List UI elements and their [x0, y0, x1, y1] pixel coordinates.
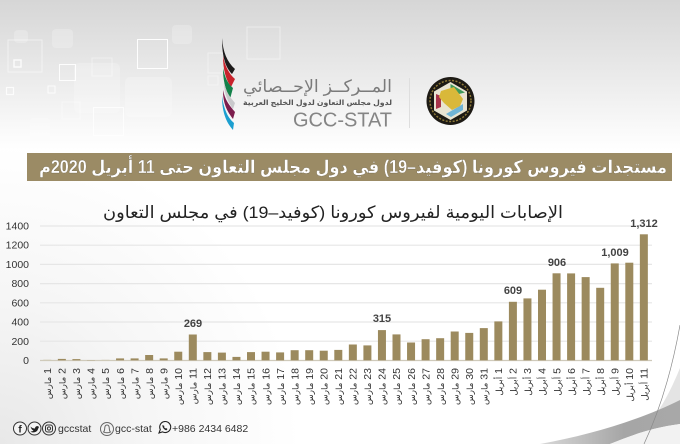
y axis labels: 800 — [11, 278, 29, 290]
x axis date labels: 1 أبريل — [493, 368, 505, 396]
x axis date labels: 11 أبريل — [639, 368, 651, 401]
x axis date labels: 22 مارس — [348, 368, 360, 405]
x axis date labels: 7 مارس — [129, 368, 141, 399]
x axis date labels: 18 مارس — [289, 368, 301, 405]
chart gridlines — [40, 226, 652, 360]
chart title: الإصابات اليومية لفيروس كورونا (كوفيد–19) في مجلس التعاون — [103, 203, 563, 223]
x axis date labels: 26 مارس — [406, 368, 418, 405]
x axis date labels: 6 أبريل — [566, 368, 578, 396]
decorative corner swoosh — [540, 325, 680, 444]
icon: twitter — [28, 422, 41, 435]
x axis date labels: 1 مارس — [42, 368, 54, 399]
x axis date labels: 15 مارس — [246, 368, 258, 405]
x axis date labels: 10 مارس — [173, 368, 185, 405]
icon: GCC emblem — [426, 77, 474, 125]
footer social contacts — [14, 422, 248, 436]
x axis date labels: 4 مارس — [86, 368, 98, 399]
logo divider — [409, 78, 410, 128]
x axis date labels: 21 مارس — [333, 368, 345, 405]
bar value labels: 315 — [373, 313, 391, 325]
x axis date labels: 9 مارس — [158, 368, 170, 399]
x axis date labels: 12 مارس — [202, 368, 214, 405]
y axis labels: 1200 — [6, 240, 29, 252]
icon: snapchat — [100, 422, 114, 436]
x axis date labels: 7 أبريل — [580, 368, 592, 396]
handle: gccstat: gccstat — [58, 423, 91, 435]
x axis date labels: 3 أبريل — [522, 368, 534, 396]
y axis labels: 600 — [11, 297, 29, 309]
icon: facebook — [14, 422, 26, 436]
x axis date labels: 8 مارس — [144, 368, 156, 399]
banner — [27, 153, 672, 181]
logo: Arabic name: المــركــز الإحــصائي — [243, 77, 392, 97]
x axis date labels: 29 مارس — [449, 368, 461, 405]
x axis date labels: 2 مارس — [57, 368, 69, 399]
y axis labels: 400 — [11, 317, 29, 329]
x axis date labels: 13 مارس — [217, 368, 229, 405]
x axis date labels: 16 مارس — [260, 368, 272, 405]
x axis date labels: 20 مارس — [318, 368, 330, 405]
bar value labels — [184, 218, 658, 330]
x axis date labels: 8 أبريل — [595, 368, 607, 396]
x axis date labels: 24 مارس — [377, 368, 389, 405]
logo: GCC-STAT wordmark: GCC-STAT — [293, 110, 392, 132]
icon: instagram — [42, 422, 56, 435]
bar chart: daily cases — [6, 218, 658, 405]
x axis date labels: 19 مارس — [304, 368, 316, 405]
bar value labels: 609 — [504, 285, 522, 297]
x axis date labels: 2 أبريل — [508, 368, 520, 396]
x axis date labels: 6 مارس — [115, 368, 127, 399]
x axis date labels: 31 مارس — [478, 368, 490, 405]
icon: facebook: f — [18, 424, 22, 436]
x axis date labels: 30 مارس — [464, 368, 476, 405]
x axis date labels: 4 أبريل — [537, 368, 549, 396]
bars — [43, 234, 648, 360]
x axis date labels: 17 مارس — [275, 368, 287, 405]
x axis date labels: 25 مارس — [391, 368, 403, 405]
y axis labels: 200 — [11, 336, 29, 348]
bar value labels: 1,312 — [630, 218, 658, 230]
x axis date labels: 9 أبريل — [609, 368, 621, 396]
x axis date labels: 27 مارس — [420, 368, 432, 405]
x axis date labels: 11 مارس — [188, 368, 200, 404]
bar value labels: 1,009 — [601, 247, 629, 259]
y axis labels: 1400 — [6, 220, 29, 232]
header background squares — [6, 25, 280, 140]
bar value labels: 906 — [548, 257, 566, 269]
x axis date labels: 14 مارس — [231, 368, 243, 405]
bar value labels: 269 — [184, 318, 202, 330]
x axis date labels: 28 مارس — [435, 368, 447, 405]
x axis date labels — [42, 368, 651, 405]
x axis date labels: 5 مارس — [100, 368, 112, 399]
x axis date labels: 23 مارس — [362, 368, 374, 405]
banner title: مستجدات فيروس كورونا (كوفيد–19) في دول مجلس التعاون حتى 11 أبريل 2020م — [39, 155, 667, 178]
icon: whatsapp — [159, 422, 171, 433]
y axis labels — [6, 220, 29, 367]
logo: GCC-STAT ribbon — [222, 38, 235, 130]
y axis labels: 1000 — [6, 259, 29, 271]
logo: Arabic subtitle: لدول مجلس التعاون لدول الخليج العربية — [243, 98, 392, 107]
x axis date labels: 5 أبريل — [551, 368, 563, 396]
handle: gcc-stat: gcc-stat — [115, 423, 152, 435]
x axis date labels: 10 أبريل — [624, 368, 636, 401]
phone number: +986 2434 6482 — [172, 423, 248, 435]
x axis date labels: 3 مارس — [71, 368, 83, 399]
y axis labels: 0 — [23, 355, 29, 367]
